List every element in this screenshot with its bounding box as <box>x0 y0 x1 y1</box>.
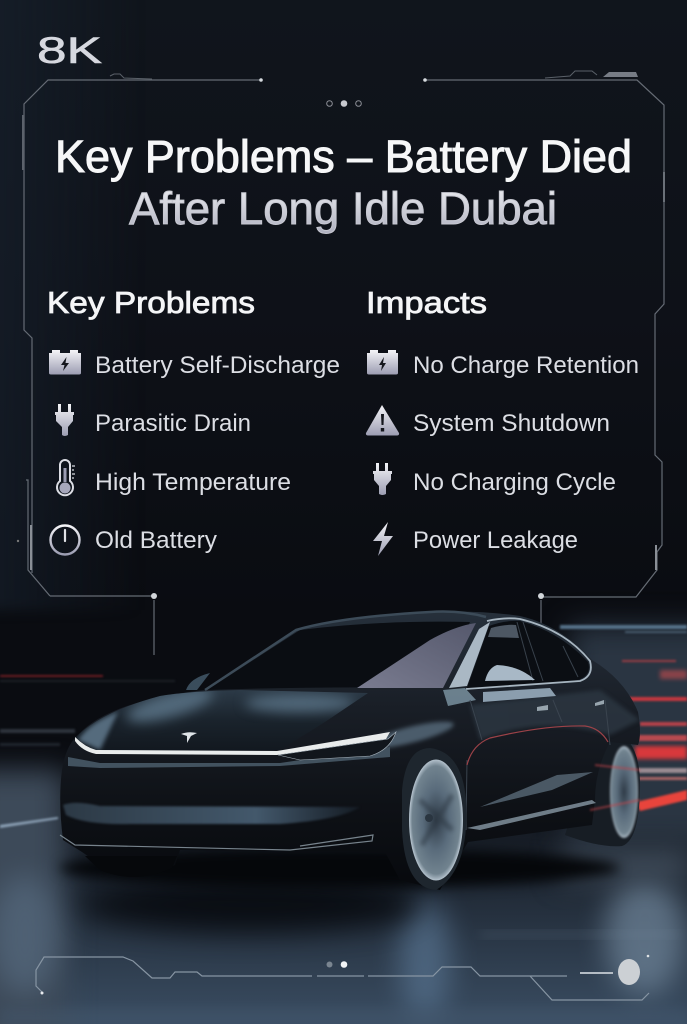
road haze left <box>0 770 65 1024</box>
title <box>55 131 632 234</box>
car: window chrome <box>466 618 591 689</box>
car: body <box>60 612 640 890</box>
panel: key problems <box>47 285 340 554</box>
car: logo <box>181 732 197 743</box>
heading: key problems: Key Problems <box>47 285 255 320</box>
HUD frame: top and sides <box>17 71 665 655</box>
HUD footer <box>36 955 649 1000</box>
car: mirror <box>485 665 535 681</box>
road glows <box>399 900 451 1020</box>
car: windshield <box>207 622 470 690</box>
title: Key Problems – Battery Died <box>55 131 632 182</box>
car: shoulder highlight <box>483 688 556 702</box>
icon: power clock <box>50 526 80 554</box>
label: high temperature: High Temperature <box>95 469 291 496</box>
label: no charge retention: No Charge Retention <box>413 352 639 379</box>
car: door seams <box>466 700 610 830</box>
icon: plug <box>373 463 392 495</box>
title: After Long Idle Dubai <box>129 183 557 234</box>
car: windshield reflection <box>357 623 476 688</box>
car: front tyre left <box>85 856 177 877</box>
logo: 8K: 8K <box>37 30 102 71</box>
icon: thermometer <box>57 460 75 495</box>
car: lower trim <box>60 835 373 850</box>
car <box>60 612 640 890</box>
car: front window glare <box>488 625 519 638</box>
car: B-pillar <box>517 622 578 681</box>
car: light bar <box>75 732 390 755</box>
right haze <box>570 625 687 845</box>
icon: lightning <box>373 522 393 556</box>
icon: battery <box>367 350 398 374</box>
label: parasitic drain: Parasitic Drain <box>95 410 251 437</box>
icon: battery <box>49 350 81 374</box>
pagination dots <box>327 100 361 107</box>
label: battery self-discharge: Battery Self-Discharge <box>95 352 340 379</box>
car: hood gloss <box>77 691 356 750</box>
car: rear wheel <box>565 735 640 846</box>
car: left mirror <box>186 673 210 690</box>
car: front wheel <box>402 748 466 890</box>
car: A-pillar <box>449 622 490 688</box>
car: side glow <box>590 765 640 810</box>
car: ground shadow <box>60 848 620 888</box>
right streaks <box>560 625 687 629</box>
label: system shutdown: System Shutdown <box>413 410 610 437</box>
label: no charging cycle: No Charging Cycle <box>413 469 616 496</box>
car: lower front band <box>68 747 390 768</box>
car: body sheen <box>364 690 640 754</box>
heading: impacts: Impacts <box>366 285 487 320</box>
car: bumper intake <box>63 803 360 824</box>
label: power leakage: Power Leakage <box>413 527 578 554</box>
car: headlight <box>278 732 396 760</box>
car: roof edge <box>205 612 486 690</box>
label: old battery: Old Battery <box>95 527 217 554</box>
car: door handles <box>537 700 604 711</box>
car: hood <box>75 690 368 751</box>
panel: impacts <box>366 285 639 556</box>
icon: plug <box>55 404 74 436</box>
icon: warning triangle <box>366 405 399 436</box>
car: side glass <box>467 621 589 690</box>
left streaks <box>0 675 103 677</box>
